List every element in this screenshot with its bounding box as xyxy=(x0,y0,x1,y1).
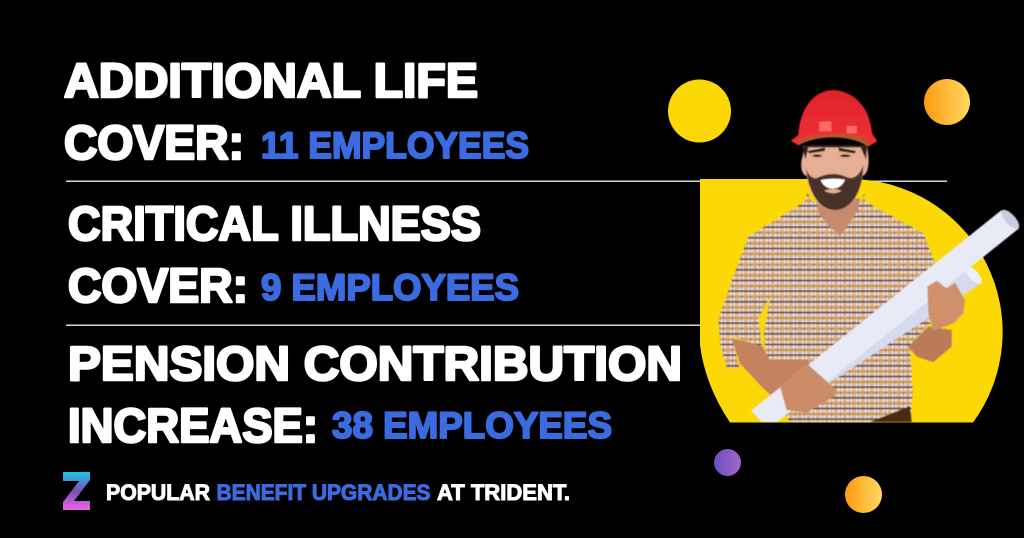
illustration: construction worker with plans xyxy=(718,90,1022,422)
benefit: critical illness cover: CRITICAL ILLNESS xyxy=(68,198,481,251)
blueprint roll back xyxy=(762,267,981,422)
footer caption: BENEFIT UPGRADES xyxy=(216,480,430,505)
left hand xyxy=(780,363,837,413)
shirt torso xyxy=(748,202,935,422)
benefit: additional life cover: 11 EMPLOYEES xyxy=(261,125,529,166)
blueprint roll back end xyxy=(963,264,984,286)
right hand xyxy=(927,281,965,331)
divider line middle xyxy=(66,324,702,326)
left sleeve xyxy=(718,237,770,369)
benefit: critical illness cover: COVER: xyxy=(68,260,248,313)
benefit: additional life cover xyxy=(64,55,529,170)
hard hat under-brim xyxy=(798,134,868,147)
benefit: critical illness cover: 9 EMPLOYEES xyxy=(261,267,519,308)
benefit: pension contribution increase xyxy=(68,338,682,453)
icon: Z logo xyxy=(63,472,90,510)
trousers xyxy=(870,406,912,422)
hard hat highlight xyxy=(819,122,857,133)
hard hat xyxy=(791,90,877,147)
neck xyxy=(816,198,860,237)
benefit: pension contribution increase: INCREASE: xyxy=(68,400,318,453)
yellow backdrop shape xyxy=(700,179,1003,422)
collar xyxy=(803,193,868,238)
benefit: additional life cover: COVER: xyxy=(64,117,244,170)
decorative circle: purple xyxy=(714,449,741,476)
smile xyxy=(821,179,845,189)
eyes and brows xyxy=(807,148,856,157)
benefit: pension contribution increase: 38 EMPLOYEES xyxy=(332,405,612,446)
blueprint roll front end xyxy=(999,207,1022,232)
footer caption: AT TRIDENT. xyxy=(437,480,570,505)
footer caption: POPULAR xyxy=(106,480,210,505)
footer caption xyxy=(106,480,570,505)
right forearm xyxy=(908,327,952,362)
hair xyxy=(802,145,867,159)
decorative circle: orange bottom xyxy=(845,476,882,513)
left forearm xyxy=(732,338,823,410)
benefit: pension contribution increase: PENSION CONTRIBUTION xyxy=(68,338,682,391)
benefit: additional life cover: ADDITIONAL LIFE xyxy=(64,55,478,108)
divider line top xyxy=(66,180,947,182)
beard xyxy=(806,165,863,210)
benefit: critical illness cover xyxy=(68,198,519,313)
blueprint roll front xyxy=(751,210,1019,422)
head xyxy=(801,145,869,210)
decorative circle: orange top xyxy=(924,79,970,125)
decorative circle: yellow xyxy=(668,80,731,142)
